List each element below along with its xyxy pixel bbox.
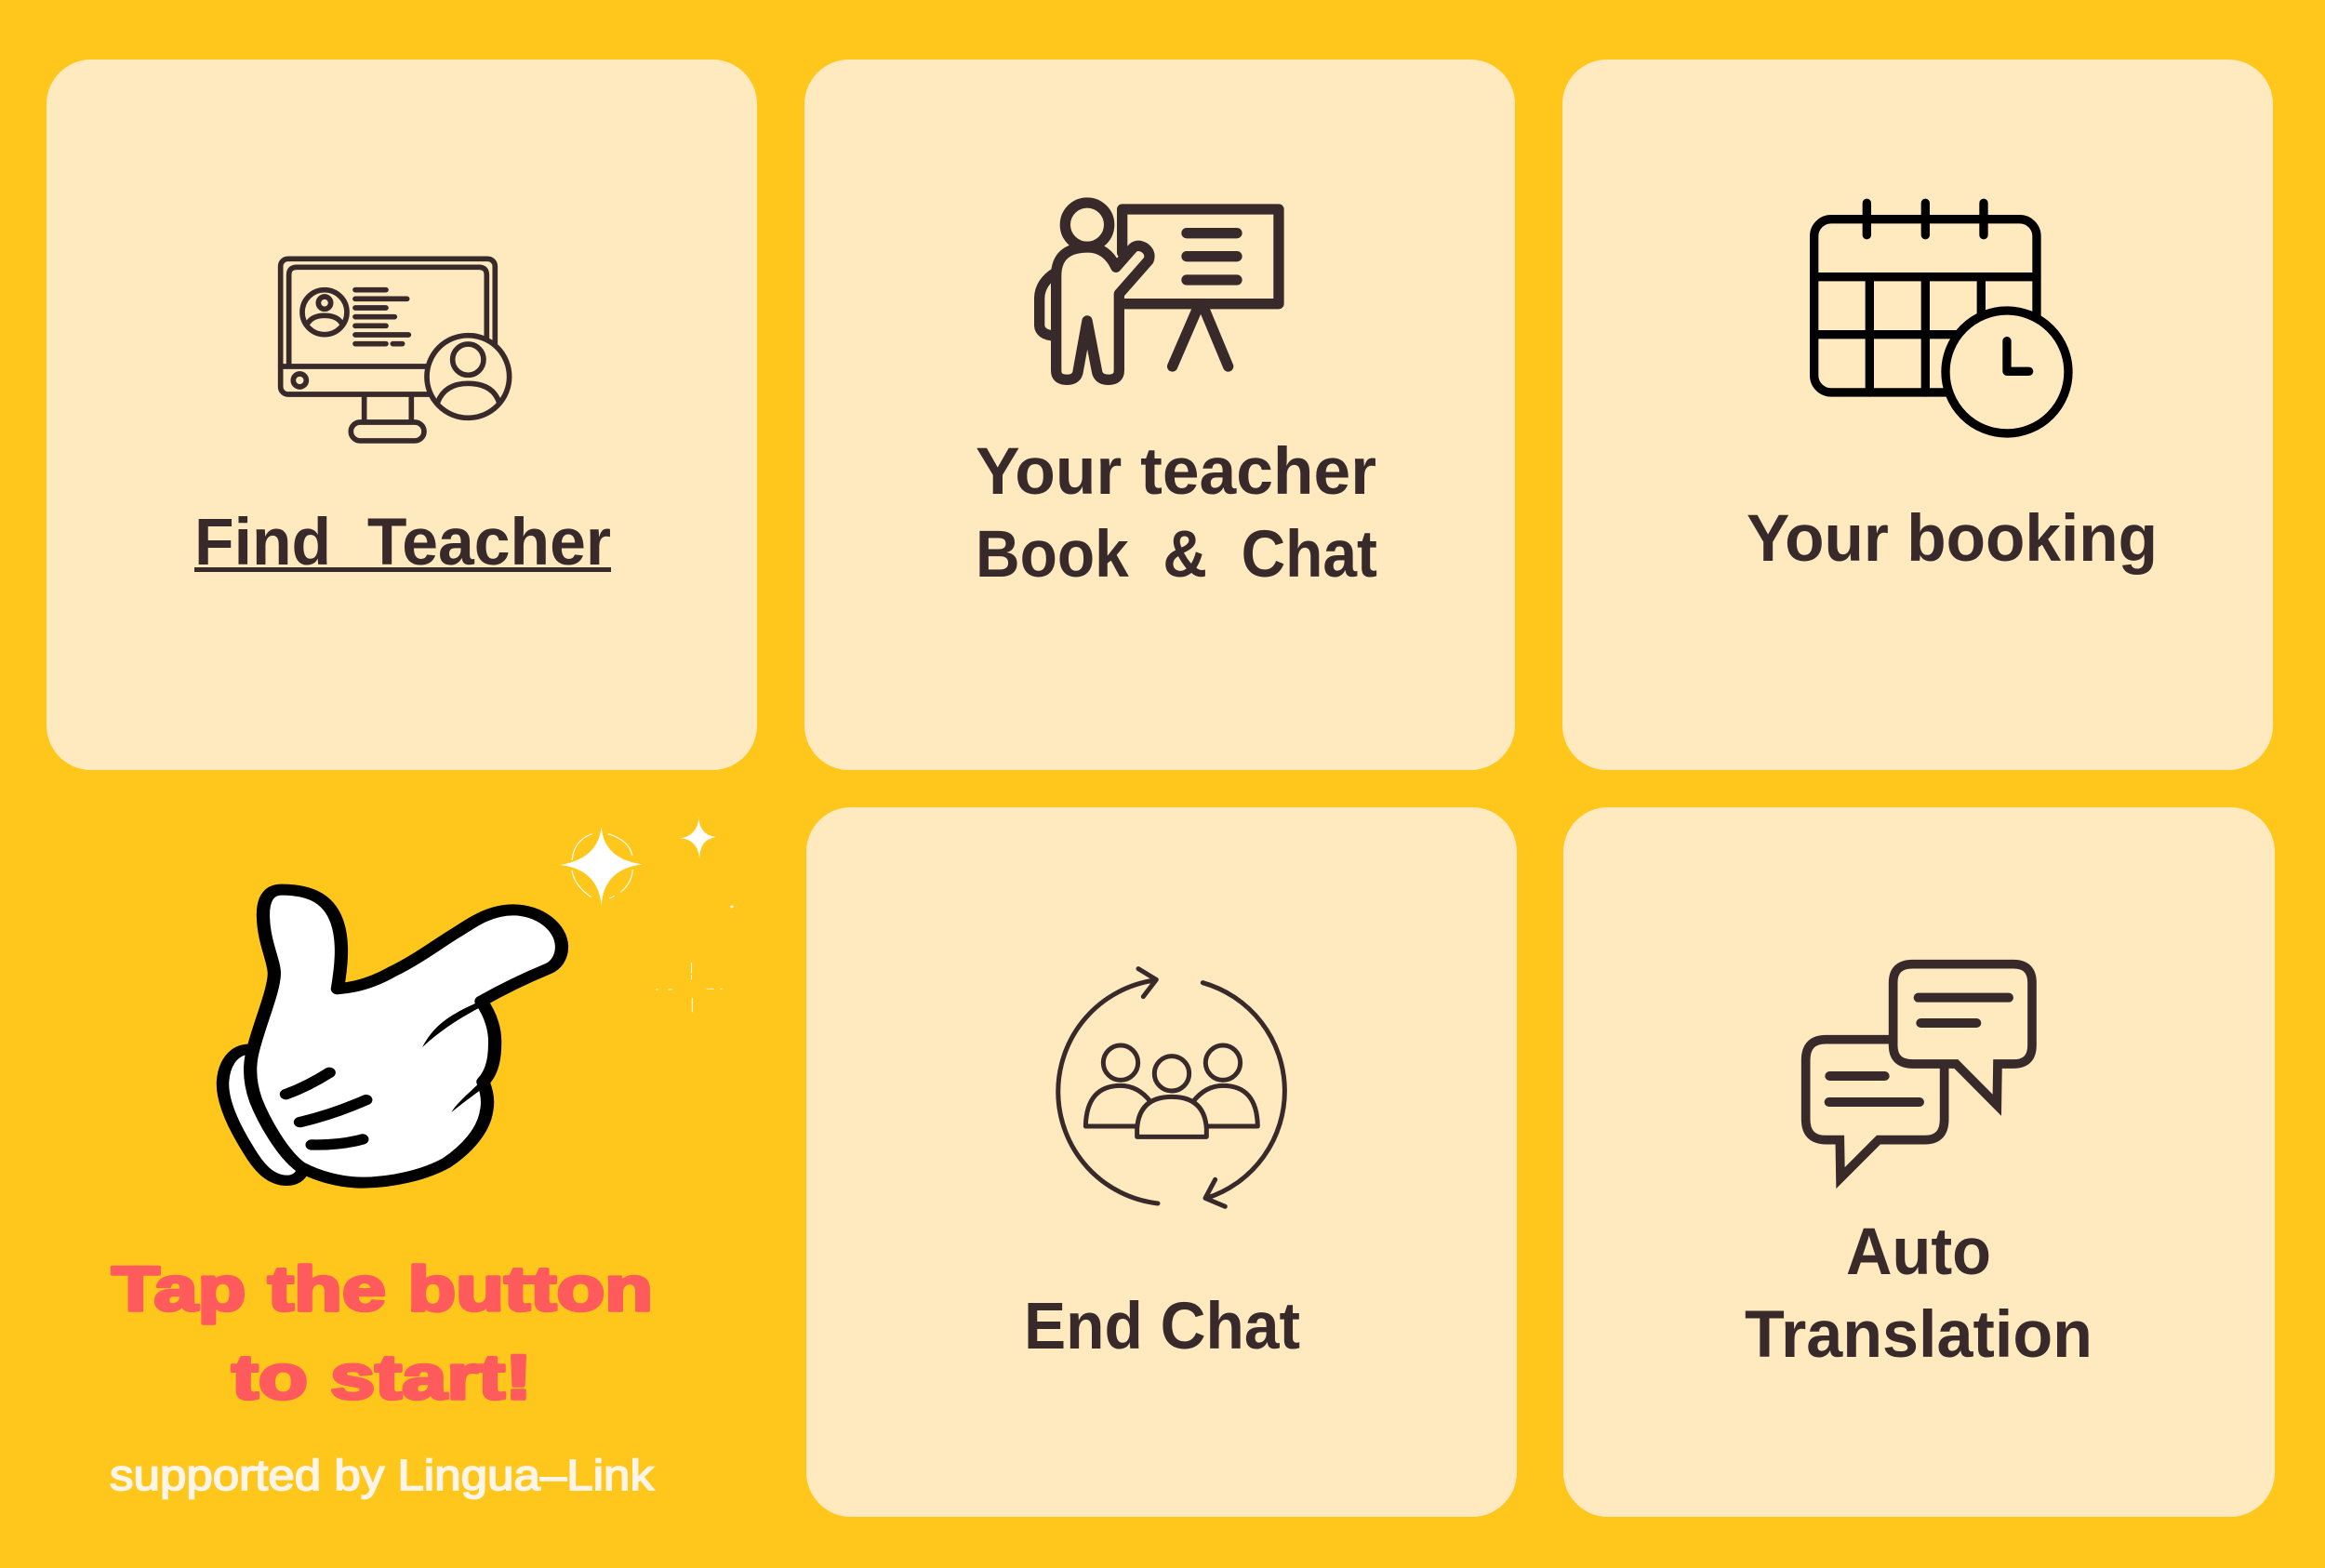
headline: tap the button to start: Tap the button	[112, 1254, 653, 1324]
label: your teacher book and chat: Your teacher	[976, 435, 1376, 509]
label: find teacher: Find Teacher	[194, 506, 611, 579]
label: auto translation: Translation	[1745, 1298, 2092, 1372]
icon: speech bubbles	[1806, 964, 2032, 1178]
label: auto translation: Auto	[1846, 1216, 1991, 1289]
label: your teacher book and chat: Book & Chat	[976, 518, 1377, 591]
glove creases	[422, 1000, 484, 1047]
panel: your teacher book and chat	[804, 60, 1515, 770]
label: your teacher book and chat	[976, 435, 1377, 591]
panel: tap the button	[110, 817, 734, 1499]
card background: find teacher	[46, 60, 757, 770]
card background: your teacher	[804, 60, 1515, 770]
glove cuff	[222, 1049, 302, 1180]
panel: find teacher	[46, 60, 757, 770]
panel: auto translation	[1563, 807, 2275, 1517]
icon: sparkles	[560, 817, 734, 1012]
headline: tap the button to start: to start!	[232, 1342, 532, 1413]
caption: supported by lingua-link: supported by Lingua–Link	[110, 1451, 655, 1499]
label: auto translation	[1745, 1216, 2092, 1372]
panel: end chat	[806, 807, 1517, 1517]
icon: group with cycle arrows	[1058, 969, 1284, 1206]
card background: your booking	[1562, 60, 2273, 770]
icon: calendar with clock	[1814, 203, 2068, 433]
glove body	[250, 890, 562, 1183]
icon: pointing glove hand	[222, 890, 562, 1183]
label: your booking: Your booking	[1747, 502, 2158, 576]
label: end chat: End Chat	[1024, 1290, 1300, 1363]
card background: end chat	[806, 807, 1517, 1517]
card background: auto translation	[1563, 807, 2275, 1517]
icon: monitor with profile	[281, 259, 510, 441]
headline: tap the button to start	[112, 1254, 653, 1413]
panel: your booking	[1562, 60, 2273, 770]
icon: teacher at board	[1040, 203, 1279, 379]
